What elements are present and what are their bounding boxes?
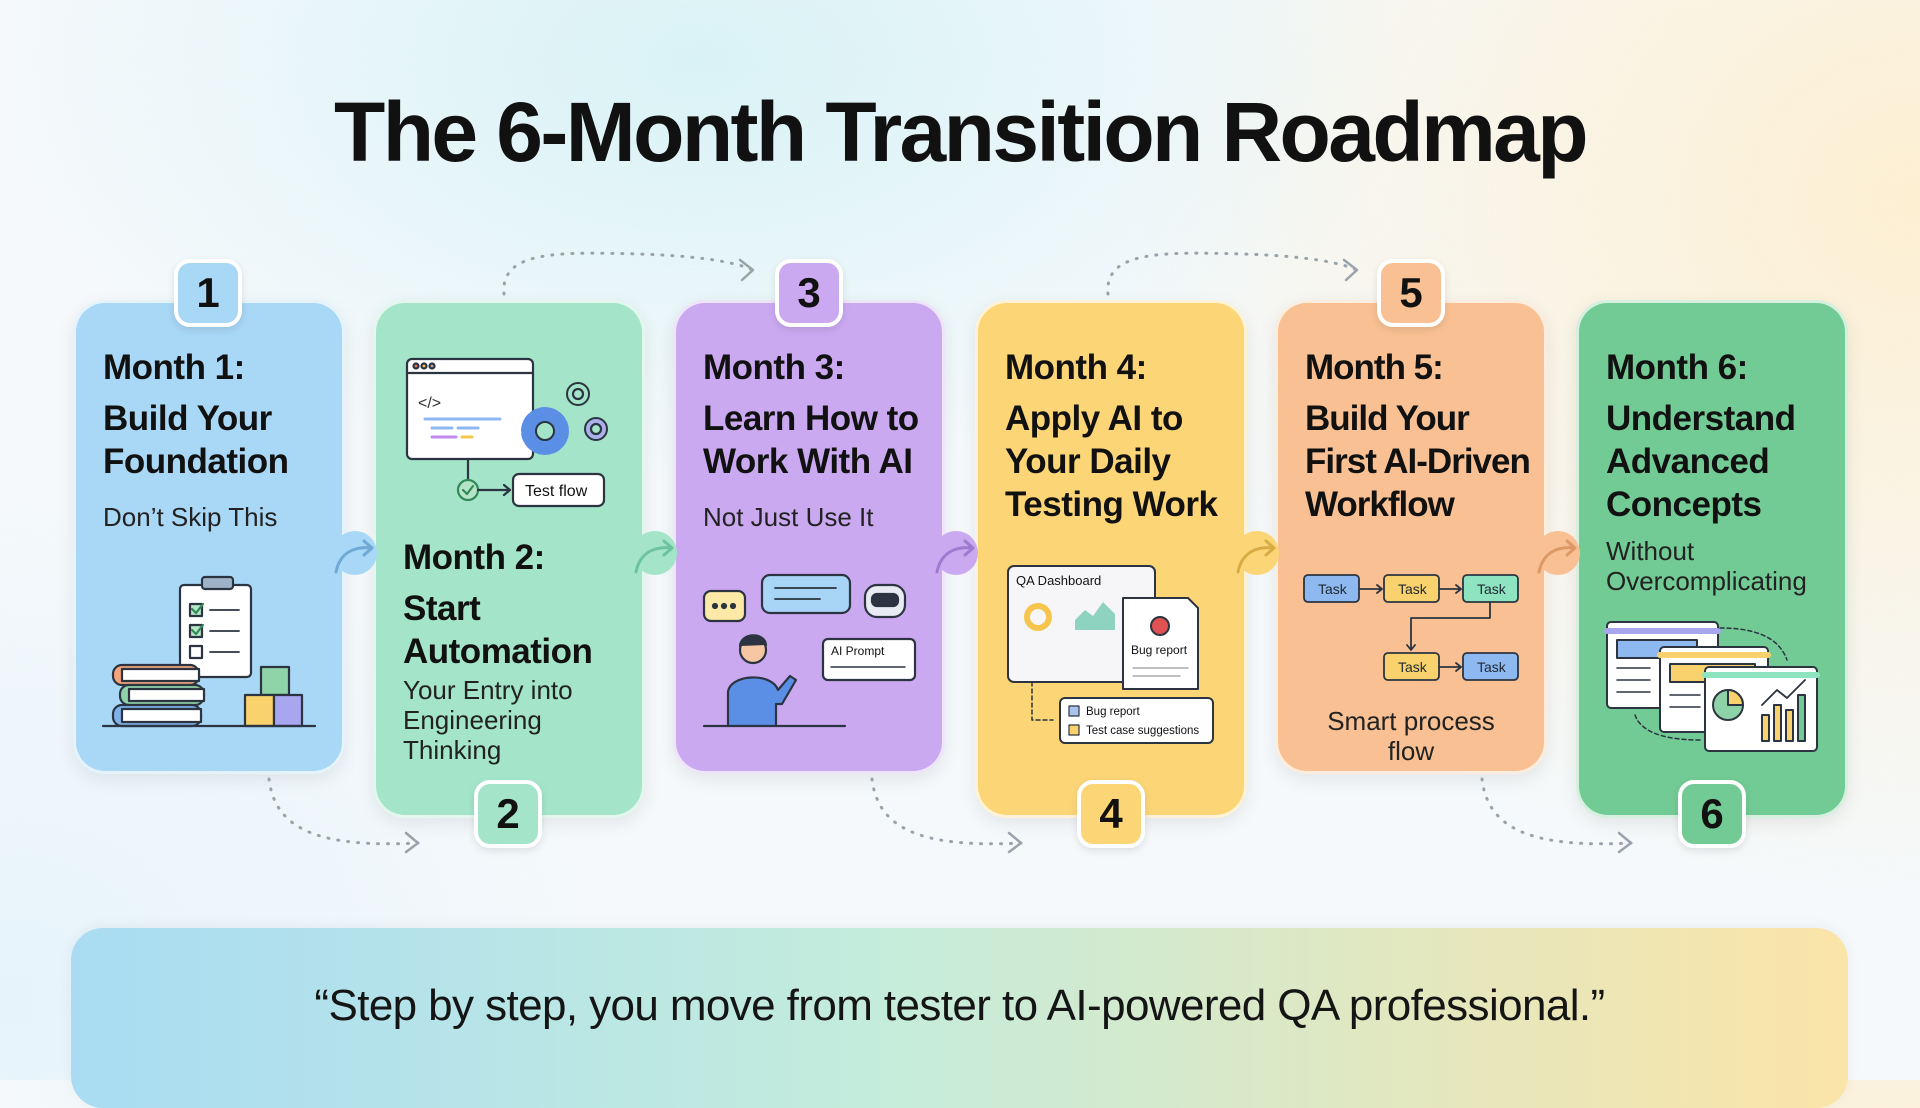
- heading: month 5: Month 5:: [1305, 348, 1443, 387]
- heading: month 4: Your Daily: [1005, 442, 1171, 481]
- heading: month 3: Work With AI: [703, 442, 913, 481]
- icon: QA dashboard with bug report: QA Dashboard: [1016, 573, 1101, 588]
- badge 3: 3: [797, 269, 821, 316]
- heading: month 1: Foundation: [103, 442, 289, 481]
- subtitle: month 2: Thinking: [403, 735, 501, 765]
- subtitle: month 2: Your Entry into: [403, 675, 573, 705]
- icon: QA dashboard with bug report: [1008, 566, 1213, 743]
- badge 2: 2: [496, 790, 520, 837]
- icon: QA dashboard with bug report: Bug report: [1131, 643, 1188, 657]
- panel: month 4: [975, 300, 1247, 818]
- panel: month 3: [673, 300, 945, 774]
- badge 2: [474, 780, 542, 848]
- subtitle: month 2: Engineering: [403, 705, 542, 735]
- heading: month 4: Testing Work: [1005, 485, 1217, 524]
- icon: person chatting with AI: [704, 575, 915, 726]
- arrow: 1 to 2: [333, 531, 377, 575]
- icon: task flow: [1304, 575, 1518, 680]
- icon: task flow: Task: [1398, 659, 1428, 675]
- arrow: 4 to 5: [1235, 531, 1279, 575]
- badge 6: [1678, 780, 1746, 848]
- heading: month 4: Apply AI to: [1005, 399, 1183, 438]
- badge 5: 5: [1399, 269, 1423, 316]
- heading: month 2: [403, 538, 592, 671]
- heading: month 5: Workflow: [1305, 485, 1454, 524]
- quote banner: [71, 928, 1848, 1108]
- panel: month 6: [1576, 300, 1848, 818]
- subtitle: month 3: Not Just Use It: [703, 502, 874, 532]
- heading: month 3: [703, 348, 919, 481]
- heading: month 2: Month 2:: [403, 538, 545, 577]
- heading: month 1: Build Your: [103, 399, 272, 438]
- icon: task flow: Task: [1398, 581, 1428, 597]
- badge 1: [174, 259, 242, 327]
- icon: code window with gears: </>: [418, 395, 441, 412]
- heading: month 3: Learn How to: [703, 399, 919, 438]
- panel: month 1: [73, 300, 345, 774]
- arrow: dotted 1 to 2: [269, 779, 418, 852]
- heading: month 4: [1005, 348, 1218, 524]
- caption: month 5: flow: [1388, 736, 1434, 766]
- badge 1: 1: [196, 269, 220, 316]
- title: The 6-Month Transition Roadmap: [334, 85, 1586, 179]
- arrow: 5 to 6: [1536, 531, 1580, 575]
- icon: layered windows with charts: [1607, 622, 1817, 751]
- icon: person chatting with AI: AI Prompt: [831, 644, 885, 658]
- heading: month 2: Automation: [403, 632, 592, 671]
- badge 4: 4: [1099, 790, 1123, 837]
- badge 4: [1077, 780, 1145, 848]
- arrow: 3 to 4: [934, 531, 978, 575]
- subtitle: month 6: Overcomplicating: [1606, 566, 1807, 596]
- badge 5: [1377, 259, 1445, 327]
- quote text: “Step by step, you move from tester to AI-powered QA professional.”: [314, 981, 1605, 1030]
- heading: month 1: Month 1:: [103, 348, 245, 387]
- icon: books and checklist: [103, 577, 315, 726]
- heading: month 6: Understand: [1606, 399, 1795, 438]
- heading: month 6: Concepts: [1606, 485, 1761, 524]
- heading: month 5: Build Your: [1305, 399, 1469, 438]
- icon: code window with gears: Test flow: [525, 483, 588, 500]
- subtitle: month 1: Don’t Skip This: [103, 502, 277, 532]
- panel: month 5: [1275, 300, 1547, 774]
- subtitle: month 6: Without: [1606, 536, 1694, 566]
- icon: QA dashboard with bug report: Bug report: [1086, 706, 1141, 718]
- subtitle: month 2: [403, 675, 573, 765]
- subtitle: month 6: [1606, 536, 1807, 596]
- caption: month 5: Smart process: [1327, 706, 1495, 736]
- heading: month 6: [1606, 348, 1795, 524]
- arrow: dotted 2 to 3: [504, 253, 753, 294]
- icon: task flow: Task: [1477, 581, 1507, 597]
- heading: month 2: Start: [403, 589, 480, 628]
- heading: month 6: Month 6:: [1606, 348, 1748, 387]
- badge 3: [775, 259, 843, 327]
- icon: task flow: Task: [1318, 581, 1348, 597]
- heading: month 3: Month 3:: [703, 348, 845, 387]
- badge 6: 6: [1700, 790, 1724, 837]
- arrow: dotted 3 to 4: [872, 779, 1021, 852]
- heading: month 4: Month 4:: [1005, 348, 1147, 387]
- arrow: dotted 4 to 5: [1108, 253, 1357, 294]
- icon: task flow: Task: [1477, 659, 1507, 675]
- icon: code window with gears: [407, 359, 607, 506]
- heading: month 5: First AI-Driven: [1305, 442, 1530, 481]
- heading: month 5: [1305, 348, 1530, 524]
- heading: month 1: [103, 348, 289, 481]
- icon: QA dashboard with bug report: Test case suggestions: [1086, 725, 1199, 737]
- heading: month 6: Advanced: [1606, 442, 1769, 481]
- arrow: 2 to 3: [633, 531, 677, 575]
- arrow: dotted 5 to 6: [1482, 779, 1631, 852]
- caption: month 5: [1327, 706, 1495, 766]
- panel: month 2: [373, 300, 645, 818]
